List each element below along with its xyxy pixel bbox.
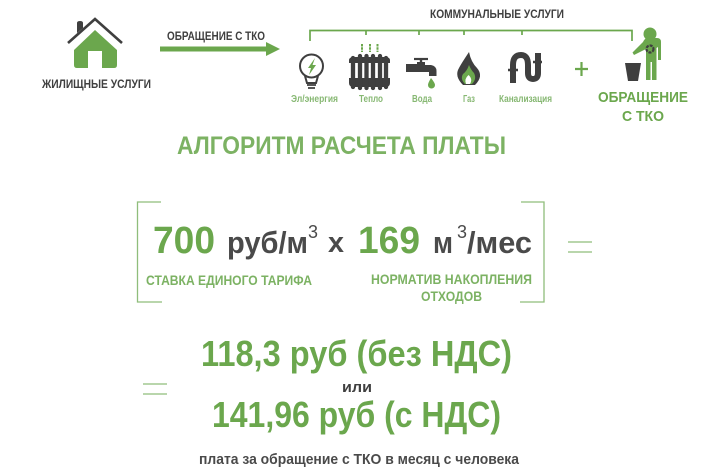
value: tariff: 700 [153, 220, 215, 262]
unit: rubles per cubic metre: руб/м [227, 225, 308, 260]
icon: gas flame [457, 52, 480, 85]
label: with TKO: С ТКО [622, 108, 664, 125]
label: water: Вода [412, 94, 432, 105]
heading: utilities: КОММУНАЛЬНЫЕ УСЛУГИ [430, 9, 564, 21]
formula bracket: right [520, 202, 544, 302]
icon: sewage pipes [508, 53, 542, 83]
icon: house [68, 19, 122, 68]
icon: plus [575, 62, 588, 76]
label: electricity: Эл/энергия [291, 94, 338, 105]
caption: tariff rate: СТАВКА ЕДИНОГО ТАРИФА [146, 272, 312, 288]
value: norm: 169 [358, 220, 420, 262]
arrow: to utilities [160, 42, 280, 56]
label: waste handling: ОБРАЩЕНИЕ [598, 89, 688, 106]
result: with VAT: 141,96 руб (с НДС) [212, 394, 501, 435]
icon: radiator [349, 44, 390, 88]
label: gas: Газ [463, 94, 475, 105]
superscript: cube: 3 [308, 222, 318, 242]
caption: accumulation norm: НОРМАТИВ НАКОПЛЕНИЯ [371, 271, 532, 287]
label: housing services: ЖИЛИЩНЫЕ УСЛУГИ [41, 79, 151, 91]
unit: cubic metres per month: 3 [457, 222, 467, 242]
title: АЛГОРИТМ РАСЧЕТА ПЛАТЫ [177, 132, 506, 160]
label: waste handling arrow caption: ОБРАЩЕНИЕ С ТКО [167, 31, 265, 43]
unit: cubic metres per month: м [433, 225, 453, 260]
result: without VAT: 118,3 руб (без НДС) [201, 333, 512, 374]
equals sign: formula [568, 242, 592, 252]
caption: accumulation norm: ОТХОДОВ [421, 288, 482, 304]
unit: cubic metres per month: /мес [467, 225, 532, 260]
operator: multiply: x [328, 227, 344, 259]
unit: cubic metres per month [433, 222, 532, 260]
caption: accumulation norm [371, 271, 532, 304]
icon: light bulb [300, 54, 323, 88]
label: heat: Тепло [359, 94, 383, 105]
formula bracket: left [138, 202, 162, 302]
icon: water tap [406, 59, 436, 88]
equals sign: result [143, 384, 167, 394]
label: sewerage: Канализация [499, 94, 552, 105]
bracket: utilities [310, 30, 632, 41]
connector: or: или [342, 379, 372, 396]
footnote: плата за обращение с ТКО в месяц с человека [199, 451, 520, 468]
icon: person with trash bin [625, 28, 661, 81]
